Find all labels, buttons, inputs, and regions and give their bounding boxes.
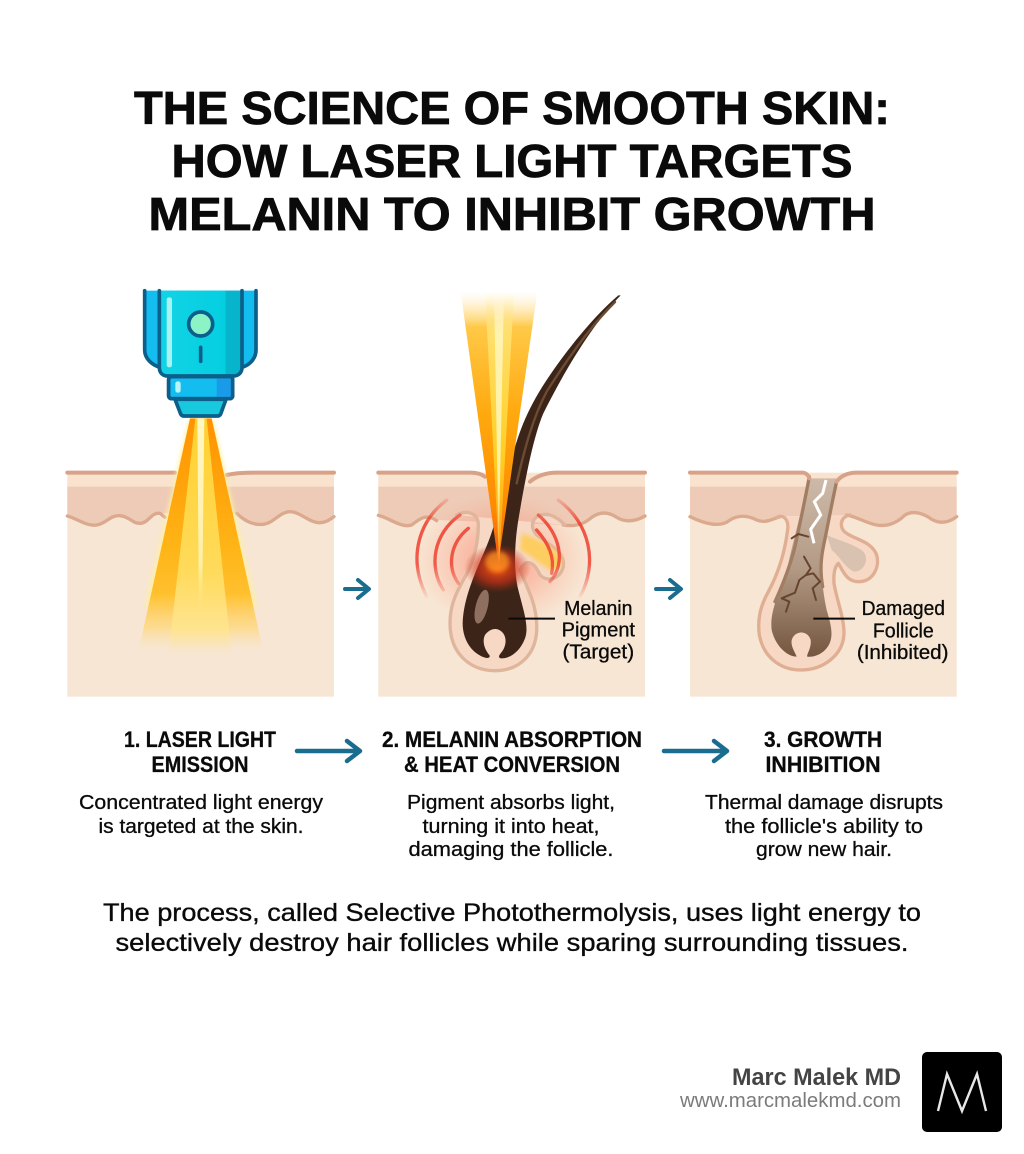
summary text bbox=[103, 899, 921, 957]
step 1: laser light emission: is targeted at the skin. bbox=[98, 816, 304, 838]
skin layers bbox=[67, 473, 334, 697]
panel: melanin absorption bbox=[378, 292, 645, 697]
title bbox=[134, 82, 890, 240]
callout: melanin pigment: Melanin bbox=[564, 598, 632, 620]
skin layers bbox=[690, 473, 957, 697]
summary text: The process, called Selective Photothermolysis, uses light energy to bbox=[103, 899, 921, 927]
follicle sheath bbox=[450, 512, 565, 671]
icon: laser handpiece bbox=[145, 291, 256, 416]
callout: damaged follicle: Follicle bbox=[873, 620, 934, 642]
step 2: melanin absorption and heat conversion bbox=[382, 727, 642, 861]
step 3: growth inhibition: the follicle's ability to bbox=[725, 816, 923, 838]
title: THE SCIENCE OF SMOOTH SKIN: bbox=[134, 82, 890, 134]
title: MELANIN TO INHIBIT GROWTH bbox=[148, 188, 876, 240]
hot zone on bulb bbox=[464, 544, 531, 592]
step 2: melanin absorption and heat conversion: & HEAT CONVERSION bbox=[404, 752, 620, 777]
step 2: melanin absorption and heat conversion: Pigment absorbs light, bbox=[407, 792, 615, 814]
sebaceous gland bbox=[827, 535, 866, 572]
follicle sheath bbox=[759, 515, 878, 670]
laser beam bbox=[138, 418, 263, 655]
step 3: growth inhibition bbox=[705, 727, 943, 861]
damaged hair follicle bbox=[690, 473, 957, 657]
arrow: panel 1 to panel 2 bbox=[345, 580, 369, 598]
step 2: melanin absorption and heat conversion: 2. MELANIN ABSORPTION bbox=[382, 727, 642, 752]
summary text: selectively destroy hair follicles while sparing surrounding tissues. bbox=[116, 929, 908, 957]
crack bbox=[811, 480, 826, 543]
step 1: laser light emission: Concentrated light energy bbox=[79, 792, 323, 814]
step 3: growth inhibition: grow new hair. bbox=[756, 839, 892, 861]
step 3: growth inhibition: 3. GROWTH bbox=[764, 727, 882, 752]
sebaceous gland heat bbox=[520, 533, 561, 570]
arrow: step 2 to step 3 bbox=[664, 741, 727, 761]
step 2: melanin absorption and heat conversion: turning it into heat, bbox=[422, 816, 600, 838]
skin layers bbox=[378, 473, 645, 697]
step 3: growth inhibition: Thermal damage disrupts bbox=[705, 792, 943, 814]
panel: laser light emission bbox=[67, 291, 334, 697]
hair shaft and bulb bbox=[463, 295, 621, 658]
step 1: laser light emission: 1. LASER LIGHT bbox=[124, 727, 276, 752]
callout: damaged follicle: (Inhibited) bbox=[857, 642, 948, 664]
arrow: step 1 to step 2 bbox=[297, 741, 360, 761]
callout: melanin pigment: (Target) bbox=[562, 641, 634, 663]
brand name and url: Marc Malek MD bbox=[732, 1064, 901, 1091]
title: HOW LASER LIGHT TARGETS bbox=[172, 135, 852, 187]
logo bbox=[922, 1052, 1002, 1132]
callout: damaged follicle bbox=[813, 598, 948, 664]
step 1: laser light emission bbox=[79, 727, 323, 838]
heat waves bbox=[417, 500, 590, 597]
fissure lines bbox=[782, 534, 820, 612]
panel: growth inhibition bbox=[690, 473, 957, 697]
callout: damaged follicle: Damaged bbox=[862, 598, 945, 620]
laser beam bbox=[461, 292, 537, 572]
arrow: panel 2 to panel 3 bbox=[656, 580, 681, 598]
brand name and url: www.marcmalekmd.com bbox=[679, 1090, 901, 1112]
callout: melanin pigment bbox=[508, 598, 635, 663]
brand name and url bbox=[679, 1064, 901, 1112]
step 2: melanin absorption and heat conversion: damaging the follicle. bbox=[408, 839, 614, 861]
heat glow bbox=[415, 493, 588, 627]
step 1: laser light emission: EMISSION bbox=[152, 752, 248, 777]
callout: melanin pigment: Pigment bbox=[562, 620, 635, 642]
step 3: growth inhibition: INHIBITION bbox=[766, 752, 880, 777]
